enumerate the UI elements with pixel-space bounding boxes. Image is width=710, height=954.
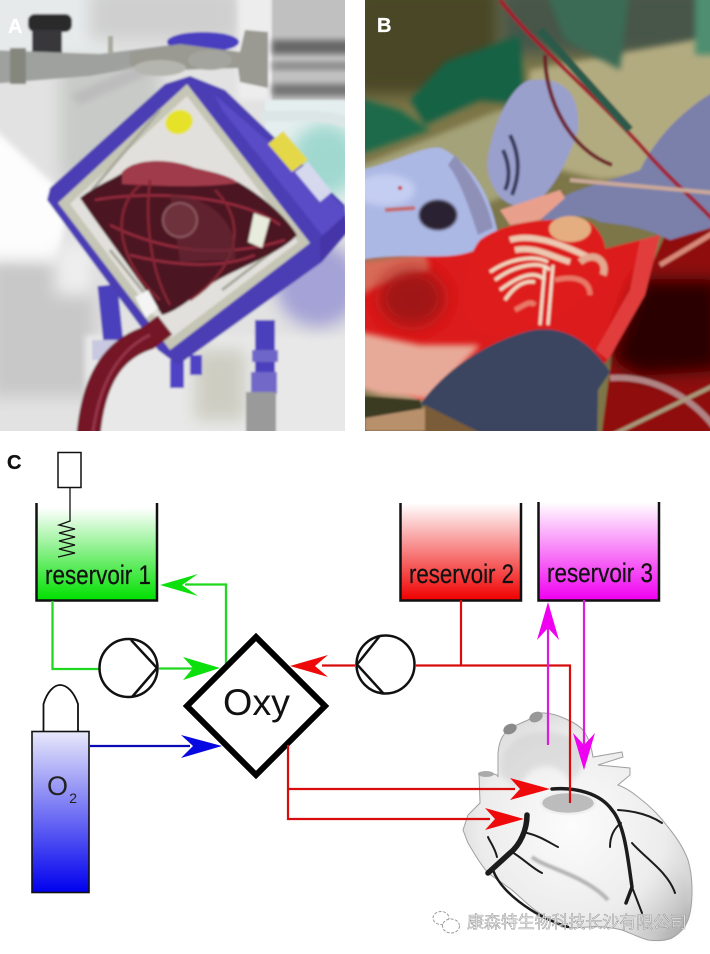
- panel C: perfusion circuit diagram: [32, 452, 692, 941]
- glass window: [58, 84, 310, 350]
- dark pool: [600, 227, 710, 431]
- tubing: [500, 0, 710, 222]
- heart illustration: [463, 710, 692, 941]
- red arrow to aorta: [510, 778, 550, 800]
- panel A: oxygenator reservoir photo: [0, 0, 360, 446]
- label B: B: [377, 15, 391, 37]
- legs: [92, 284, 278, 394]
- reservoir 1: reservoir 1: [45, 560, 151, 590]
- green drapes: [350, 0, 710, 158]
- blue ring at top: [167, 32, 239, 52]
- panel B: surgical heart photo: [350, 0, 710, 446]
- label A: A: [8, 16, 22, 38]
- reservoir 3: [538, 502, 659, 600]
- red tray: [365, 239, 642, 402]
- blue housing: [47, 76, 348, 365]
- red circuit lines: [288, 600, 570, 819]
- oxygen cylinder: O: [47, 771, 68, 801]
- yellow cap: [164, 108, 194, 136]
- green arrow to reservoir 1: [160, 574, 198, 596]
- magenta arrow up: [537, 602, 559, 640]
- coronary arteries: [488, 789, 675, 927]
- clamp rod and knob: [0, 14, 170, 105]
- magenta arrow down: [573, 733, 595, 770]
- red arrow to coronary: [485, 808, 524, 830]
- blue arrow to oxygenator: [181, 735, 222, 758]
- reservoir 2: [400, 503, 521, 600]
- blood chamber: [80, 163, 297, 315]
- green arrow to oxygenator: [183, 657, 220, 680]
- label C: C: [7, 452, 21, 474]
- watermark: 康森特生物科技长沙有限公司: [467, 908, 687, 933]
- green circuit lines: [52, 584, 226, 669]
- red arrow to oxygenator: [290, 655, 328, 677]
- blood tube: [88, 325, 165, 440]
- oxygen line: [90, 745, 190, 747]
- oxygen cylinder: 2: [69, 790, 77, 806]
- weight block and spring: [58, 452, 81, 557]
- lower tray rim: [365, 395, 425, 431]
- yellow label: [268, 131, 308, 172]
- lower dark glove: [420, 329, 610, 445]
- oxygenator: [187, 637, 325, 775]
- reservoir 3: reservoir 3: [547, 558, 653, 588]
- oxygenator: Oxy: [223, 682, 291, 723]
- exposed heart: [464, 190, 606, 336]
- pump 2: [356, 636, 414, 694]
- white valve: [135, 290, 158, 318]
- reservoir 2: reservoir 2: [409, 559, 514, 589]
- clamp on top of housing: [130, 30, 268, 88]
- oxygen cylinder: [32, 685, 89, 892]
- pump 1: [100, 639, 158, 697]
- tube at right: [318, 119, 343, 126]
- magenta lines: [548, 600, 584, 750]
- gloves: [487, 80, 578, 206]
- reservoir 1: [36, 503, 157, 600]
- icon: chat bubbles: [433, 912, 460, 933]
